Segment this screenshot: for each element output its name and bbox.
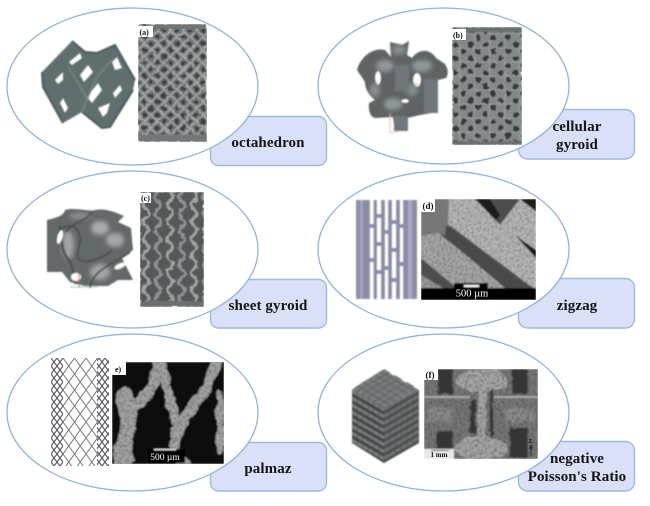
ellipse: negative Poisson's Ratio (318, 334, 569, 491)
label box: octahedron (210, 116, 326, 166)
SEM photo (c): sheet gyroid sample (140, 192, 204, 307)
label text: octahedron: octahedron (231, 135, 305, 151)
tag (c): (c) (141, 194, 150, 203)
tag (f) (424, 369, 438, 380)
tag (a): (a) (140, 28, 149, 37)
label text: cellular gyroid: cellular (552, 119, 602, 135)
SEM photo (a): octahedron sample (138, 24, 207, 142)
ellipse: octahedron (7, 8, 258, 165)
ellipse: palmaz (7, 334, 258, 491)
tag (b) (452, 29, 466, 40)
ellipse: sheet gyroid (7, 171, 258, 328)
CAD model: auxetic lattice cube (352, 369, 419, 463)
label box: sheet gyroid (210, 280, 326, 328)
panel: octahedron (7, 8, 326, 166)
tag e) (112, 362, 126, 375)
SEM photo (d): zigzag sample (421, 199, 536, 300)
tag (b): (b) (453, 31, 463, 40)
CAD model: palmaz stent mesh (51, 358, 109, 466)
axis label z: z (528, 438, 532, 445)
panel: sheet gyroid (7, 171, 326, 328)
CAD model: cellular gyroid unit cell (357, 41, 448, 133)
tag (a) (138, 26, 153, 37)
label box: cellular gyroid (518, 110, 634, 159)
label box: negative Poisson's Ratio (518, 442, 634, 491)
CAD model: sheet gyroid unit cell (47, 209, 133, 288)
scale label 500 µm (e): 500 µm (150, 453, 180, 463)
scale label 500 µm (d): 500 µm (456, 288, 488, 300)
SEM photo (e): palmaz sample (112, 362, 224, 466)
tag (d): (d) (422, 201, 434, 211)
label text: sheet gyroid: sheet gyroid (229, 298, 308, 314)
SEM photo (b): cellular gyroid sample (452, 27, 522, 145)
SEM photo (f): auxetic sample (424, 368, 538, 460)
label text: Poisson's Ratio: Poisson's Ratio (528, 469, 626, 485)
panel: zigzag (318, 171, 634, 328)
tag e): e) (115, 365, 122, 374)
CAD model: zigzag pattern (356, 200, 417, 299)
label box: zigzag (518, 278, 634, 328)
CAD model: octahedron unit cell (42, 41, 135, 128)
tag (f): (f) (426, 370, 434, 380)
label text: negative: negative (550, 451, 604, 467)
panel: palmaz (7, 334, 326, 491)
label text: cellular gyroid line 2: gyroid (556, 137, 599, 153)
label text: zigzag: zigzag (557, 298, 598, 314)
panel: negative Poisson's Ratio (318, 334, 634, 491)
label text: palmaz: palmaz (244, 461, 292, 477)
scale label 1 mm (f): 1 mm (431, 451, 448, 459)
ellipse: zigzag (318, 171, 569, 328)
ellipse: cellular gyroid (318, 8, 569, 164)
tag (d) (421, 199, 435, 212)
panel: cellular gyroid (318, 8, 634, 164)
label box: palmaz (210, 442, 326, 491)
